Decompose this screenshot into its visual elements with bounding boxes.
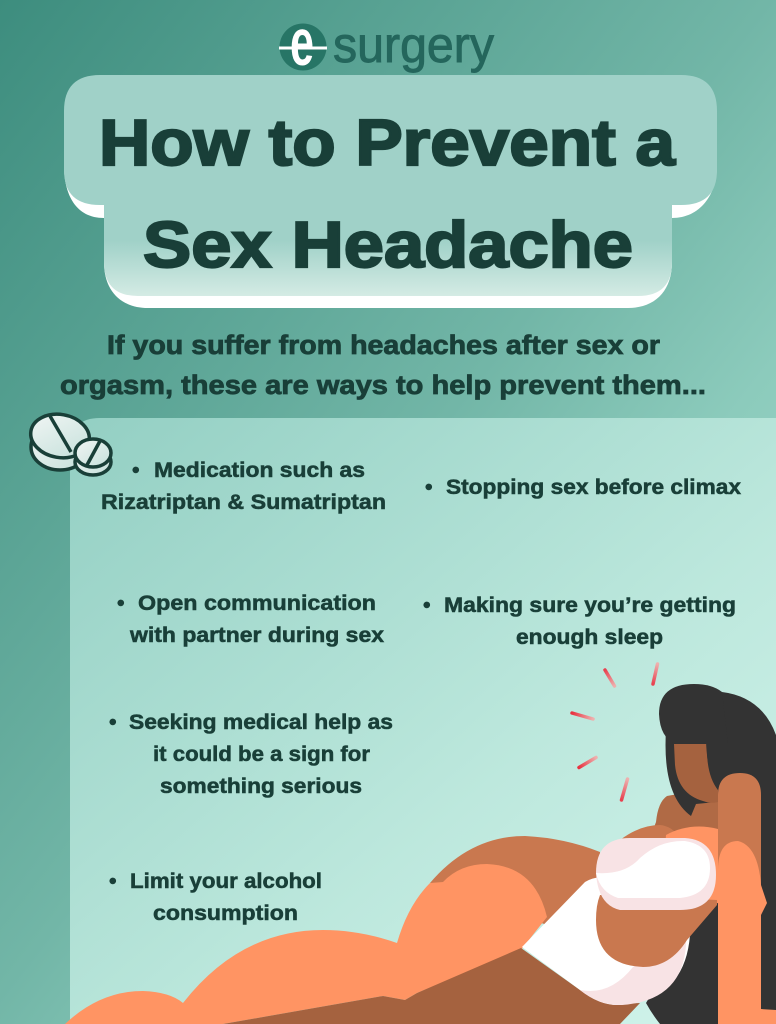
tip: alcohol: consumption bbox=[153, 901, 298, 925]
upper arm bbox=[718, 773, 761, 900]
tip: alcohol: Limit your alcohol bbox=[130, 869, 322, 893]
face bbox=[674, 744, 718, 803]
tip: sleep bbox=[423, 593, 736, 649]
subheading bbox=[60, 330, 706, 400]
tip: sleep: Making sure you’re getting bbox=[444, 593, 736, 617]
tip: stopping: • bbox=[425, 475, 433, 499]
tip: alcohol bbox=[109, 869, 322, 925]
tip: medication: • bbox=[132, 458, 140, 482]
tip: sleep: • bbox=[423, 593, 431, 617]
torso bbox=[596, 895, 717, 967]
tip: medical help bbox=[109, 710, 393, 798]
forearm and foot bbox=[718, 841, 776, 1024]
illustration: woman bbox=[65, 684, 776, 1024]
panel: tips bbox=[70, 418, 776, 1024]
thigh bbox=[223, 948, 640, 1024]
underwear bbox=[522, 878, 690, 1005]
hair back bbox=[646, 690, 776, 1024]
chest left bbox=[620, 825, 680, 860]
heading line 2: Sex Headache bbox=[143, 208, 633, 281]
tip: communication bbox=[117, 591, 384, 647]
hip top bbox=[430, 836, 600, 925]
neck and shoulder bbox=[650, 790, 718, 838]
tip: medication: Medication such as bbox=[154, 458, 365, 482]
tip: medical help: • bbox=[109, 710, 117, 734]
tip: alcohol: • bbox=[109, 869, 117, 893]
subheading: orgasm, these are ways to help prevent them... bbox=[60, 370, 706, 400]
tip: communication: Open communication bbox=[138, 591, 376, 615]
tip: medical help: something serious bbox=[160, 774, 362, 798]
logo: e bbox=[290, 5, 314, 79]
bangs bbox=[659, 684, 728, 744]
tip: medical help: it could be a sign for bbox=[153, 742, 371, 766]
tip: communication: • bbox=[117, 591, 125, 615]
heading line 1: How to Prevent a bbox=[99, 106, 676, 179]
tip: medication bbox=[101, 458, 386, 514]
title card bbox=[64, 75, 717, 308]
tip: stopping: Stopping sex before climax bbox=[446, 475, 741, 499]
chest right bbox=[660, 827, 718, 910]
subheading: If you suffer from headaches after sex or bbox=[107, 330, 661, 360]
bra bbox=[596, 838, 716, 910]
icon: pain ticks bbox=[572, 664, 658, 800]
tip: sleep: enough sleep bbox=[516, 625, 663, 649]
body orange bbox=[65, 864, 547, 1024]
tip: medication: Rizatriptan & Sumatriptan bbox=[101, 490, 386, 514]
hair strand bbox=[666, 730, 716, 816]
tip: medical help: Seeking medical help as bbox=[129, 710, 393, 734]
tip: communication: with partner during sex bbox=[129, 623, 384, 647]
icon: pills bbox=[27, 410, 111, 475]
logo: surgery bbox=[333, 17, 494, 73]
logo bbox=[279, 5, 494, 79]
